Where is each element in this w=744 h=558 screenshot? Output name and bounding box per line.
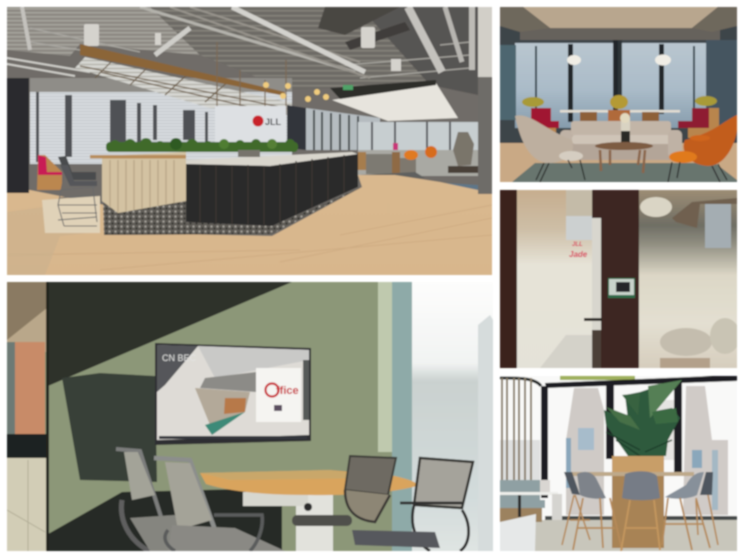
- windows with mullions: [500, 40, 737, 130]
- pendant lamps: [84, 24, 401, 71]
- terrazzo floor inset: [102, 193, 348, 236]
- ceiling strip: [560, 375, 635, 380]
- wood beam: [80, 44, 285, 96]
- cork planter column: [612, 456, 664, 548]
- light fluted reception counter: [90, 152, 186, 213]
- white suspended ceiling: [332, 83, 458, 121]
- wall-mounted TV: [155, 343, 311, 445]
- photo: frosted glass door with JLL Jade sign: [500, 190, 740, 368]
- pink JLL Jade sign: [569, 242, 588, 259]
- buildings outside: [500, 386, 728, 515]
- windows: [30, 92, 292, 164]
- chair far right: [352, 458, 473, 551]
- left corridor view: [7, 282, 47, 551]
- blurred furniture behind glass: [660, 318, 740, 368]
- wall-mounted TV: CN BEC: [162, 353, 197, 363]
- ceiling: [500, 7, 737, 40]
- photo: meeting room with wall-mounted TV: [7, 282, 493, 551]
- left dark pillar: [7, 78, 29, 193]
- beige sofa: [560, 121, 682, 160]
- sofa at left: [500, 480, 562, 522]
- room booking touch screen: [608, 278, 635, 298]
- photo: cafe with tall plant and bar stools: [500, 375, 737, 551]
- stone sculpture: [448, 132, 478, 173]
- lounge at back: [358, 143, 478, 191]
- dark fluted reception desk: [186, 150, 358, 226]
- hanging rods and lamps: [216, 43, 330, 116]
- door handle: [584, 318, 602, 321]
- city view through window: [412, 282, 493, 551]
- pendant globes: [567, 54, 671, 66]
- pink JLL Jade sign: Jade: [569, 250, 588, 259]
- left frosted glass: [517, 190, 592, 368]
- orchid and coffee table: [595, 113, 653, 173]
- table top: [572, 472, 694, 476]
- stool left: [573, 472, 622, 550]
- beige lounge chair: [515, 115, 585, 182]
- bar stools: [562, 471, 718, 551]
- stool far right: [696, 472, 718, 545]
- table: [200, 470, 417, 551]
- plant: [604, 380, 682, 456]
- ceiling mesh and ducts: [7, 7, 478, 95]
- back dining table: [560, 110, 680, 121]
- flowers: [522, 95, 717, 109]
- stool center: [621, 471, 660, 551]
- right column: [478, 7, 492, 194]
- photo: lounge with sofa and orange chair: [500, 7, 737, 182]
- red side seats: [531, 108, 719, 138]
- bar stools: [58, 156, 97, 226]
- JLL sign wall: JLL: [265, 117, 282, 127]
- chandelier: [640, 197, 672, 217]
- wood floor: [7, 175, 492, 275]
- green planter hedge: [106, 138, 298, 152]
- pink JLL Jade sign: JLL: [572, 242, 583, 248]
- dark wall and glazed rooms: [287, 105, 478, 158]
- dark door post: [592, 190, 639, 368]
- right frosted glass: [639, 190, 737, 368]
- JLL sign wall: [215, 106, 286, 143]
- white chair foreground: [500, 514, 536, 551]
- window frame: [378, 282, 412, 551]
- photo: reception lobby with JLL sign: [7, 7, 492, 275]
- stool far left: [562, 472, 590, 545]
- chair far middle: [292, 456, 396, 526]
- orange lounge chair: [668, 115, 737, 182]
- red bench: [37, 155, 62, 190]
- green wall and shadows: [46, 282, 292, 551]
- floor: [500, 143, 737, 182]
- chair near left front: [154, 458, 285, 551]
- left dark frame: [500, 190, 517, 368]
- rug: [512, 163, 737, 182]
- slatted screen: [500, 378, 541, 480]
- stool right: [662, 472, 710, 550]
- wall-mounted TV: ffice: [276, 385, 299, 397]
- floor: [500, 520, 737, 551]
- window frames: [541, 375, 737, 520]
- skylight ceiling panel: [75, 57, 292, 112]
- chair near left back: [115, 446, 178, 552]
